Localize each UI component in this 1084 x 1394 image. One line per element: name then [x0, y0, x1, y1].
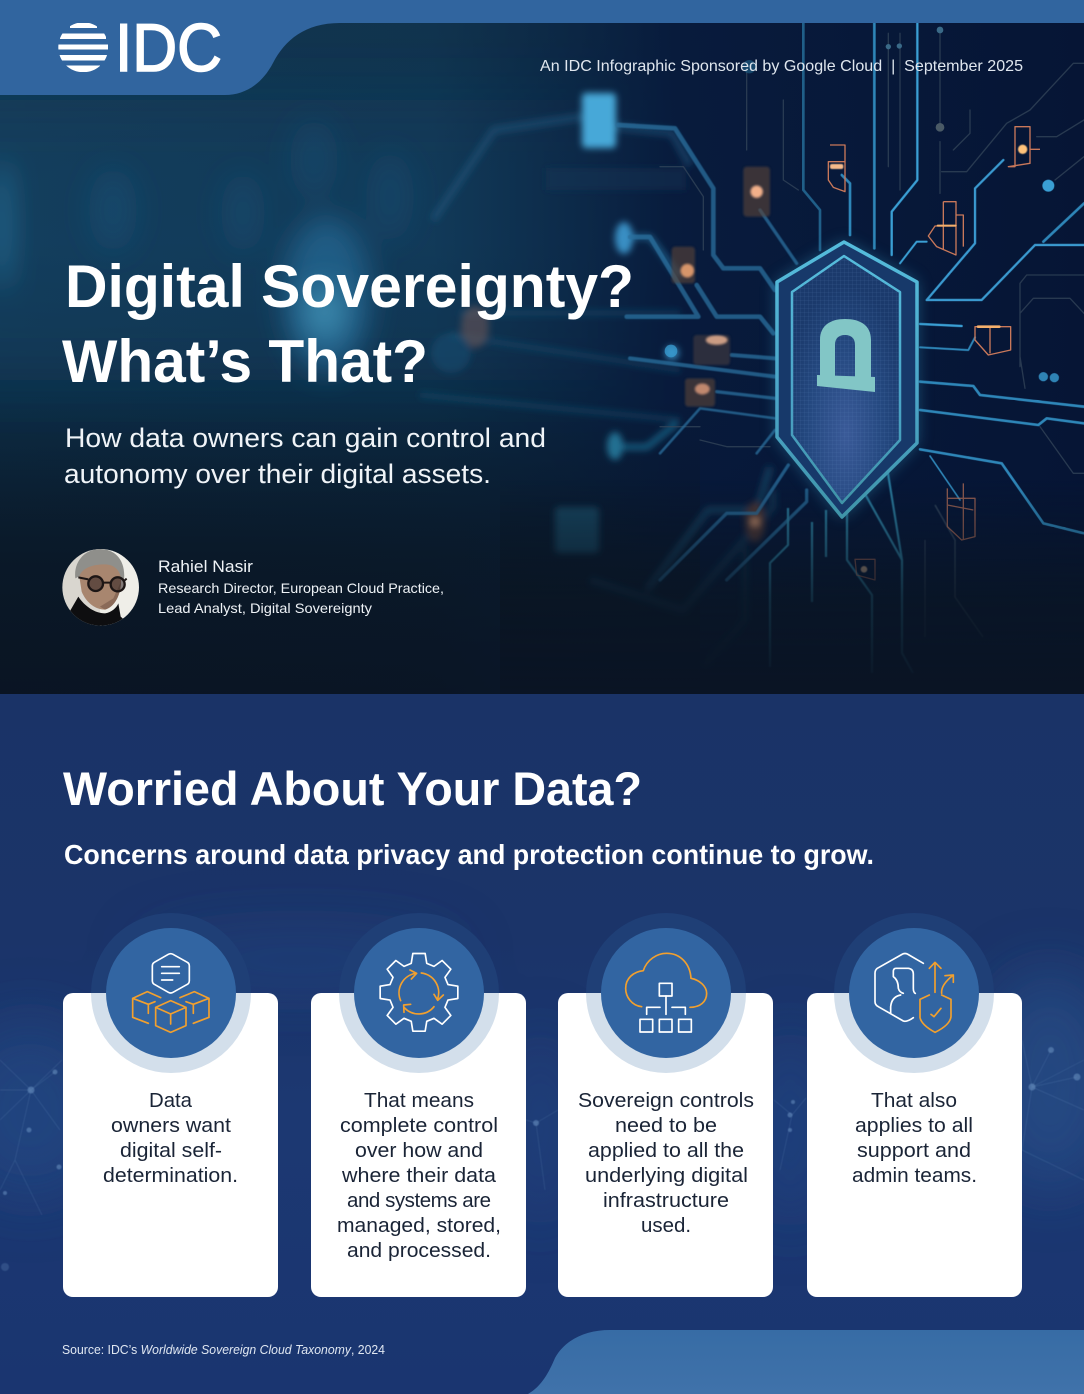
title: Digital Sovereignty? — [65, 253, 634, 320]
author details — [158, 558, 444, 616]
card 2 text: over how and — [355, 1139, 483, 1162]
subtitle: How data owners can gain control and — [65, 423, 546, 453]
card 2 text — [337, 1089, 501, 1262]
icon: hexagon document and cubes — [133, 954, 209, 1032]
card 2 text: where their data — [341, 1164, 497, 1187]
circuit traces around shield — [618, 20, 1084, 580]
card 4 text: support and — [857, 1139, 971, 1162]
card 1 text: digital self- — [120, 1139, 222, 1162]
orange circuit components — [828, 127, 1040, 580]
lower traces fading out — [768, 473, 967, 664]
icon: padlock arch — [817, 319, 875, 392]
card 2 text: and systems are — [347, 1189, 491, 1212]
card 3 text: applied to all the — [588, 1139, 744, 1162]
lower section background — [0, 694, 1084, 1272]
card 2 text: complete control — [340, 1114, 498, 1137]
card 3 text: infrastructure — [603, 1189, 729, 1212]
title: What’s That? — [62, 328, 428, 395]
author details: Lead Analyst, Digital Sovereignty — [158, 600, 372, 616]
card 4 text: admin teams. — [852, 1164, 977, 1187]
icon: striped globe — [58, 23, 108, 72]
icon: gear with cycle arrows — [380, 953, 458, 1031]
card 1 text: Data — [149, 1089, 193, 1112]
blurred left-side traces and chips — [422, 88, 778, 588]
card 2 text: That means — [364, 1089, 474, 1112]
IDC logo: IDC — [115, 10, 222, 86]
card 3 text — [578, 1089, 754, 1237]
card 1 text — [103, 1089, 238, 1187]
source note: Source: IDC’s Worldwide Sovereign Cloud Taxonomy, 2024 — [62, 1343, 385, 1357]
title — [62, 253, 634, 395]
author portrait — [62, 549, 139, 626]
sponsor line: An IDC Infographic Sponsored by Google Cloud | September 2025 — [540, 58, 1023, 75]
bottom tab — [528, 1330, 1084, 1394]
author details: Rahiel Nasir — [158, 558, 254, 576]
icon: person, shield and arrows — [875, 953, 953, 1032]
card 3 text: used. — [641, 1214, 691, 1237]
IDC logo — [58, 22, 221, 72]
section heading: Worried About Your Data? — [63, 762, 642, 815]
shield with padlock — [777, 242, 917, 517]
icon: cloud hierarchy — [626, 953, 707, 1032]
card 1 text: determination. — [103, 1164, 238, 1187]
subtitle — [64, 423, 546, 489]
card 4 text — [852, 1089, 977, 1187]
card 3: sovereign controls — [558, 913, 773, 1297]
section subheading: Concerns around data privacy and protection continue to grow. — [64, 839, 874, 870]
header band with logo tab — [0, 0, 1084, 95]
card 2 text: managed, stored, — [337, 1214, 501, 1237]
card 2: complete control — [311, 913, 526, 1297]
card 4 text: That also — [871, 1089, 957, 1112]
card 3 text: underlying digital — [585, 1164, 748, 1187]
card 4 text: applies to all — [855, 1114, 973, 1137]
card 1 text: owners want — [111, 1114, 231, 1137]
card 1: data owners — [63, 913, 278, 1297]
card 3 text: Sovereign controls — [578, 1089, 754, 1112]
card 2 text: and processed. — [347, 1239, 491, 1262]
card 4: support and admin teams — [807, 913, 1022, 1297]
hero background image: blurred circuit board — [0, 0, 1084, 694]
subtitle: autonomy over their digital assets. — [64, 459, 491, 489]
author details: Research Director, European Cloud Practice, — [158, 580, 444, 596]
card 3 text: need to be — [615, 1114, 717, 1137]
